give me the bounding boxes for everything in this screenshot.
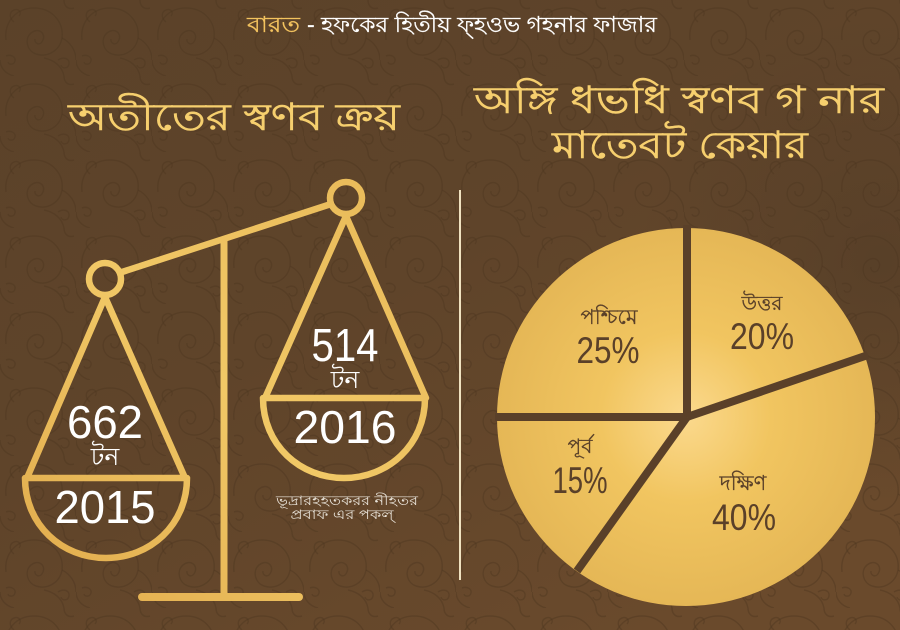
heading: past gold purchases: অতীতের স্বণব ক্রয় [67,93,401,139]
source note [275,493,419,523]
top title: বারত [246,12,301,37]
label: 2016 value [294,319,396,453]
slice: north 20% [730,291,794,357]
divider [459,190,461,580]
label: 2015 value: 662 [67,396,143,448]
label: 2016 value: 514 [312,319,378,371]
icon: balance scale [25,182,426,597]
top title: - হফকের হিতীয় ফ্হওভ গহনার ফাজার [307,11,658,39]
slice: west 25%: পশ্চিমে [580,305,638,329]
left pan [25,297,187,558]
slice: south 40%: 40% [712,497,776,538]
slice: east 15% [552,434,608,501]
label: 2015 value: টন [90,441,120,471]
slice: east 15%: পূর্ব [568,434,595,458]
source note: প্রবাফ এর পকল্ [290,507,396,523]
heading: regional gold jewellery market share: অঙ্গি ধভধি স্বণব গ নার [473,78,885,122]
pie chart [495,225,875,606]
slice: north 20%: 20% [730,316,794,357]
scale beam [122,205,328,272]
slice: east 15%: 15% [552,460,608,501]
label: 2016 value: 2016 [294,401,396,453]
label: 2015 value [54,396,156,533]
left ring [89,263,121,295]
slice: north 20%: উত্তর [741,291,783,315]
slice: west 25%: 25% [576,330,640,371]
heading: regional gold jewellery market share: মাতেবট কেয়ার [551,121,809,167]
slice: south 40% [712,471,776,538]
heading: regional gold jewellery market share [473,78,885,167]
pie disc [497,228,875,606]
right ring [330,182,362,214]
slice: west 25% [576,305,640,371]
slice separators [495,225,868,571]
label: 2015 value: 2015 [54,481,156,533]
scale post and base [142,238,299,597]
right pan [263,216,426,478]
label: 2016 value: টন [330,364,360,394]
slice: south 40%: দক্ষিণ [719,471,767,495]
source note: ভূদ্রারহহতকরর নীহতর [275,493,419,509]
